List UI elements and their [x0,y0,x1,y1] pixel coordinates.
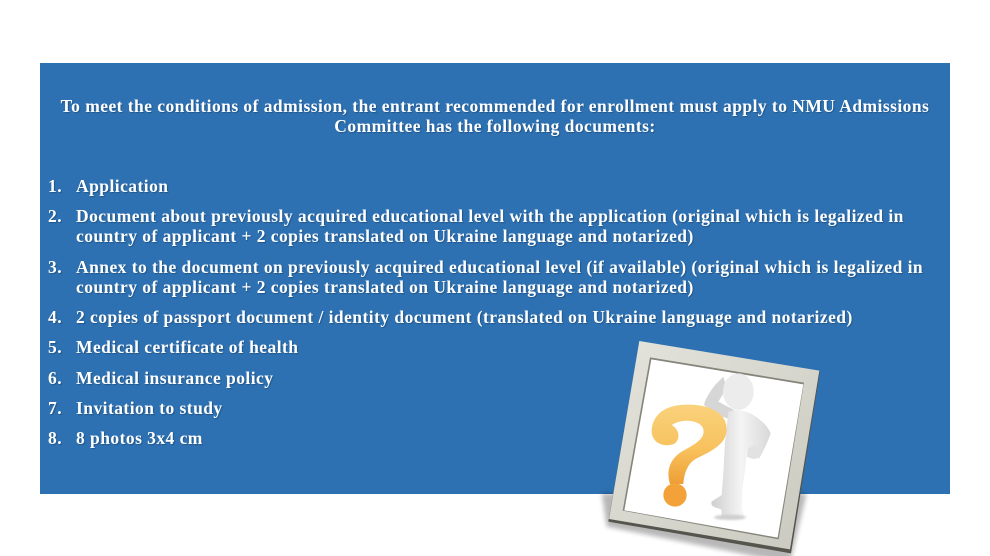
item 3 [48,257,924,298]
item 1: Application [76,176,168,196]
frame [608,341,820,553]
item 3: Annex to the document on previously acquired educational level (if available) (original which is legalized in [76,257,923,277]
item 3: country of applicant + 2 copies translated on Ukraine language and notarized) [76,277,694,297]
item 4: 4. [48,307,62,327]
item 2 [48,206,904,248]
item 6: Medical insurance policy [76,368,273,388]
document list [48,176,924,450]
item 7: 7. [48,398,62,418]
shadow under frame [602,493,807,556]
question mark [652,405,727,507]
item 4: 2 copies of passport document / identity document (translated on Ukraine language and notarized) [76,307,853,327]
heading: To meet the conditions of admission, the entrant recommended for enrollment must apply to NMU Admissions [61,96,929,116]
heading [60,96,930,138]
person figure [704,373,771,520]
item 3: 3. [48,257,62,277]
item 8: 8. [48,428,62,448]
raised arm [704,377,734,419]
heading: Committee has the following documents: [334,116,656,136]
hand on hip [747,445,761,459]
item 2: Document about previously acquired educational level with the application (original which is legalized in [76,206,904,226]
panel: blue background [40,63,950,494]
item 5: Medical certificate of health [76,337,298,357]
item 5: 5. [48,337,62,357]
foot shadow [714,515,746,520]
item 8: 8 photos 3x4 cm [76,428,203,448]
item 2: 2. [48,206,62,226]
item 6: 6. [48,368,62,388]
item 1: 1. [48,176,62,196]
head [723,373,754,410]
item 2: country of applicant + 2 copies translated on Ukraine language and notarized) [76,226,694,246]
item 7: Invitation to study [76,398,223,418]
body and legs [711,410,771,519]
